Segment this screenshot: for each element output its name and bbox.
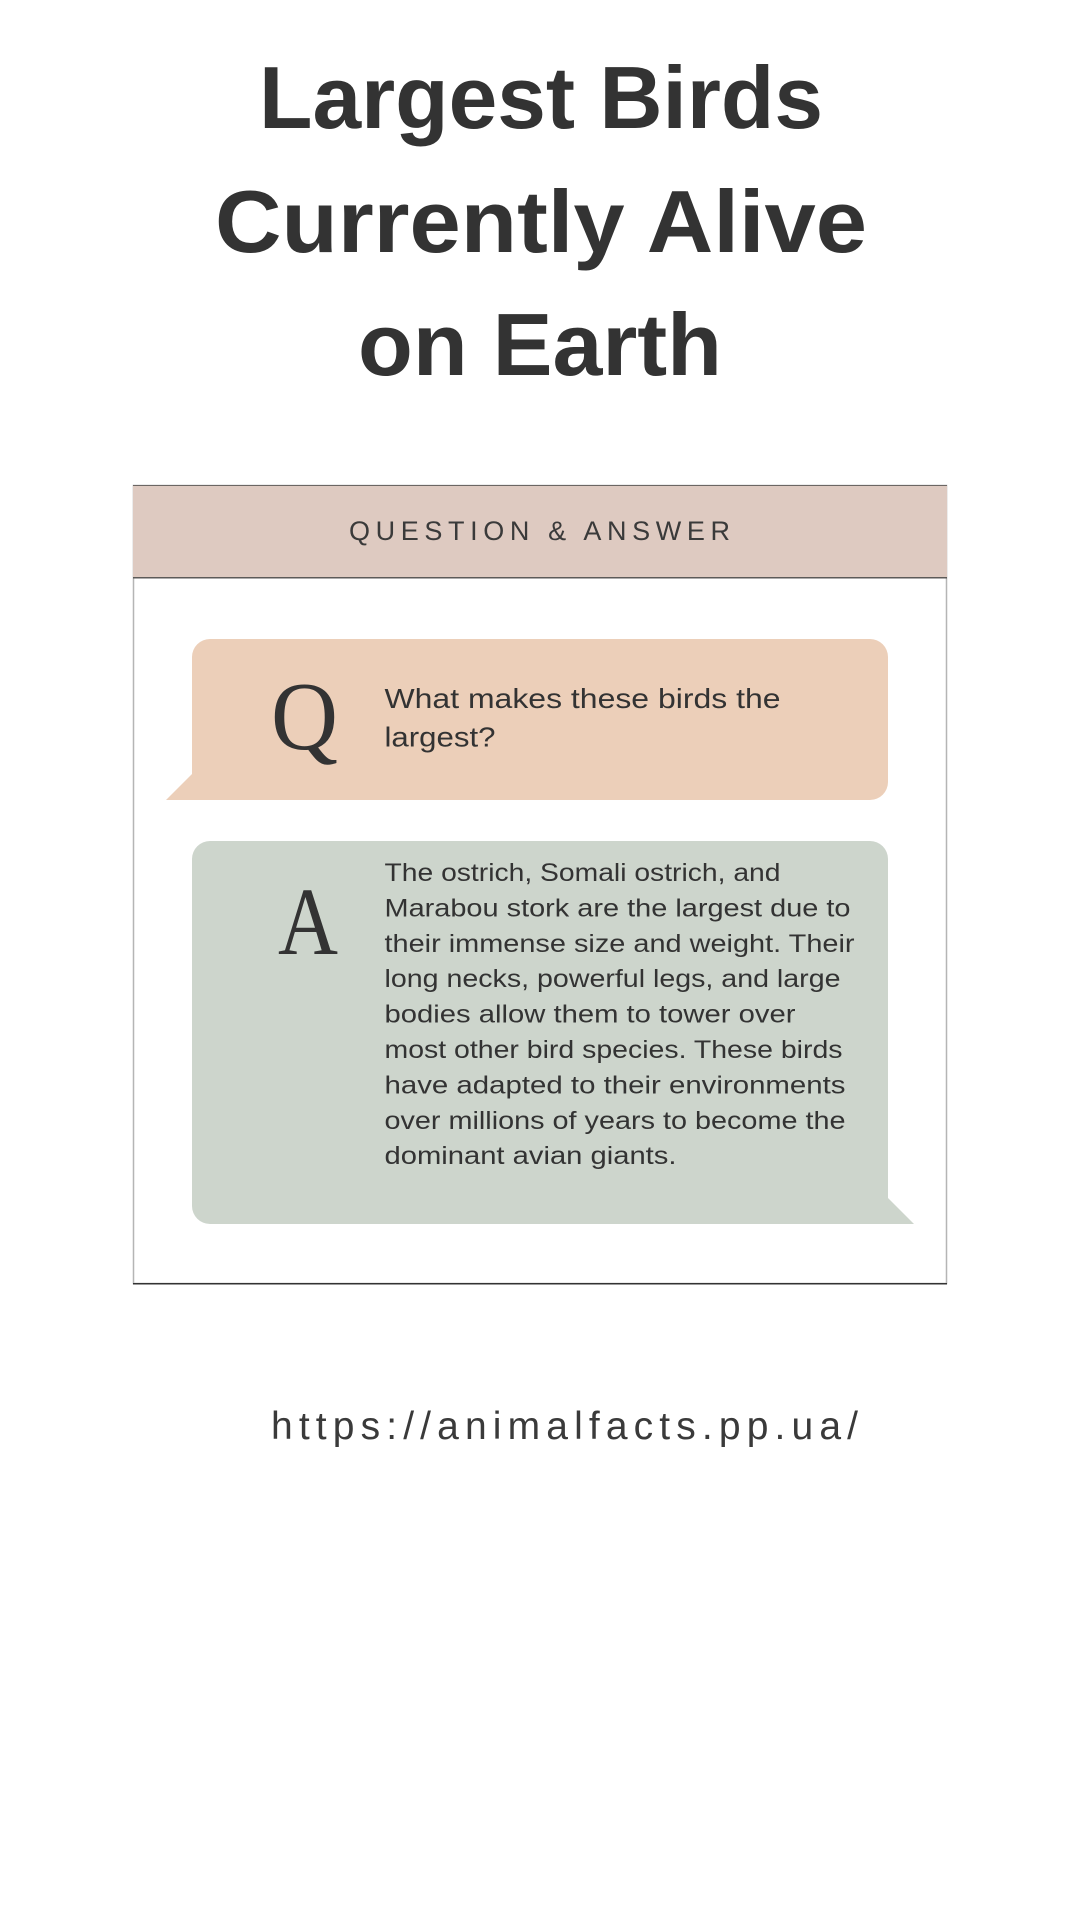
panel: question and answer: [133, 485, 947, 1284]
answer bubble: [192, 841, 914, 1224]
panel header: [133, 485, 947, 578]
title: Largest Birds: [259, 48, 823, 147]
title: on Earth: [358, 295, 722, 394]
letter Q: Q: [271, 663, 338, 771]
question text: [384, 683, 780, 752]
question text: What makes these birds the: [384, 683, 780, 714]
answer text: dominant avian giants.: [384, 1142, 676, 1170]
title: Currently Alive: [215, 172, 867, 271]
panel header: QUESTION & ANSWER: [349, 516, 730, 546]
title: [215, 48, 867, 394]
answer text: most other bird species. These birds: [384, 1036, 842, 1064]
answer text: [384, 859, 854, 1170]
answer text: their immense size and weight. Their: [384, 930, 854, 958]
question bubble: [166, 639, 888, 800]
answer text: long necks, powerful legs, and large: [384, 965, 840, 993]
answer text: over millions of years to become the: [384, 1107, 846, 1135]
answer text: bodies allow them to tower over: [384, 1000, 796, 1028]
letter A: A: [278, 868, 338, 975]
answer text: Marabou stork are the largest due to: [384, 894, 850, 922]
question text: largest?: [384, 722, 496, 752]
website url: https://animalfacts.pp.ua/: [271, 1405, 858, 1448]
answer text: have adapted to their environments: [384, 1072, 846, 1100]
answer text: The ostrich, Somali ostrich, and: [384, 859, 780, 887]
panel body: [134, 486, 946, 1284]
